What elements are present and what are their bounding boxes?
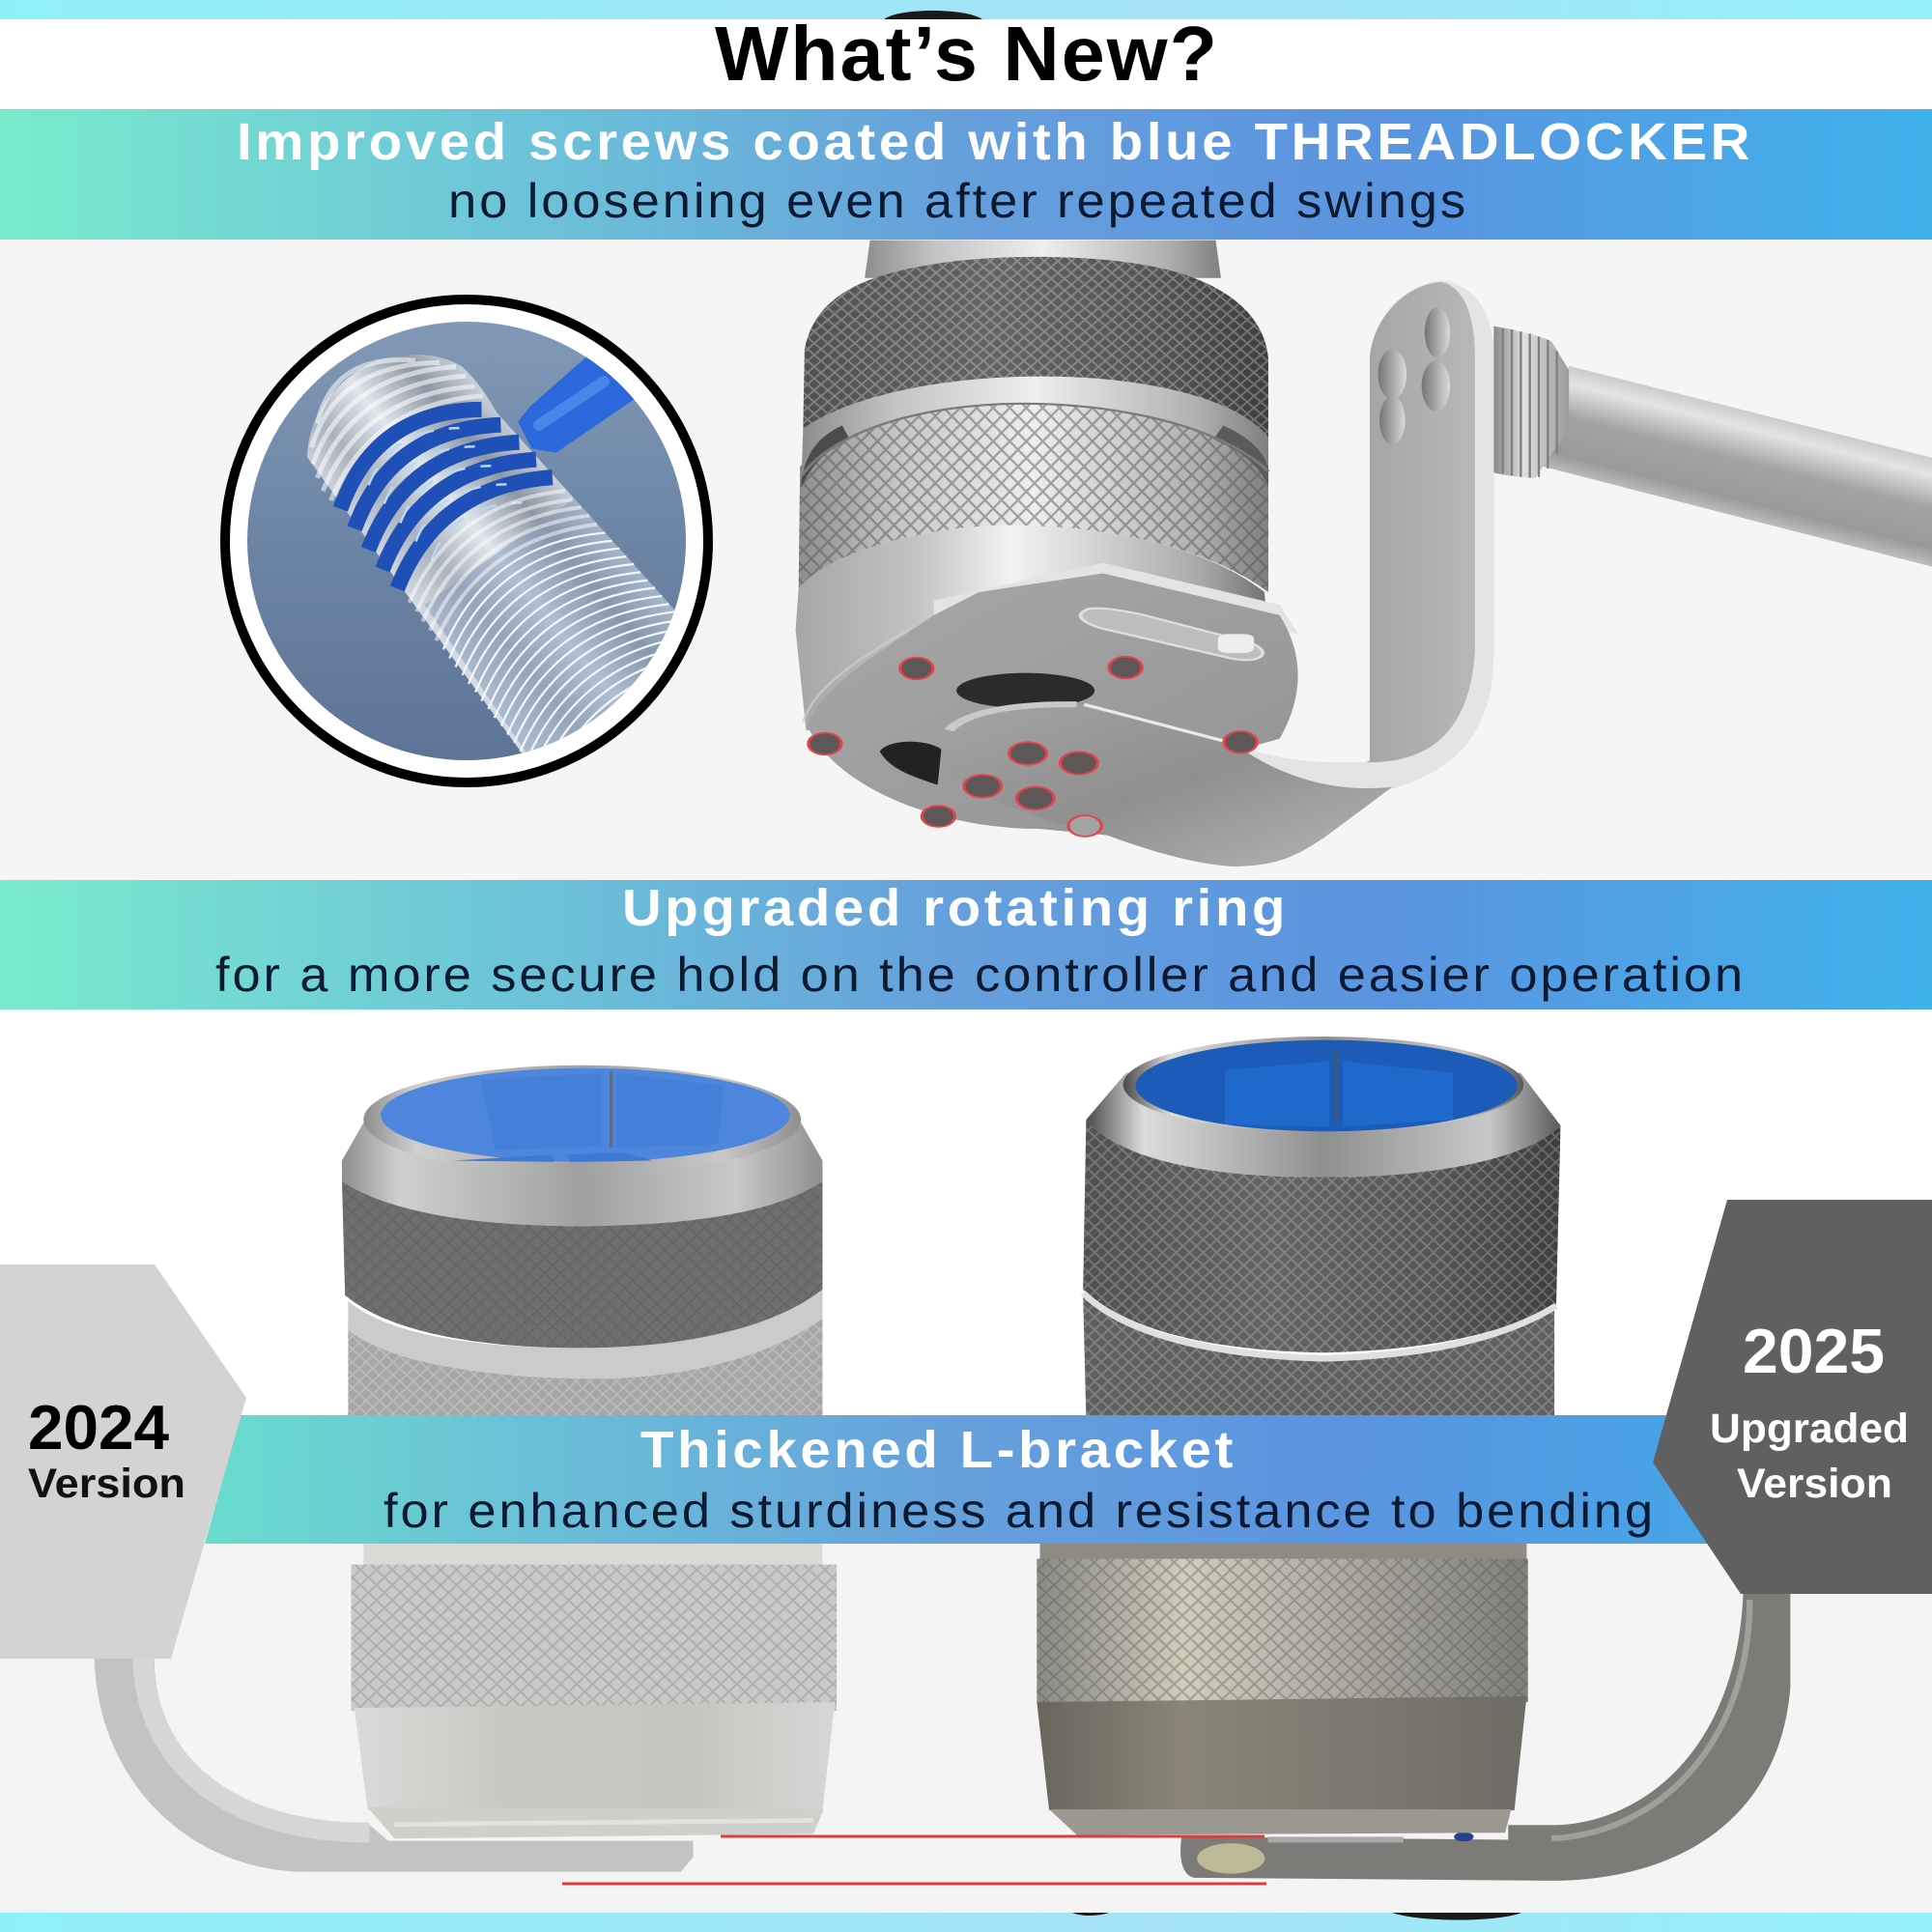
base plate ledge	[934, 563, 1298, 634]
2025 dark knurled ring	[1083, 1120, 1560, 1352]
dark knurled ring	[803, 257, 1268, 438]
band 3 heading: Thickened L-bracket	[640, 1421, 1236, 1479]
badge year 2024: 2024	[28, 1392, 169, 1463]
product: 2024 version grip	[95, 1065, 837, 1872]
threaded rod	[1493, 327, 1932, 567]
2025 bracket	[1180, 1577, 1790, 1881]
panel: threadlocker screws	[0, 240, 1932, 880]
lower bracket arm	[941, 704, 1392, 867]
badge: 2024 version	[0, 1264, 246, 1659]
plate rim	[803, 628, 911, 722]
2025 lower knurled ring	[1083, 1295, 1554, 1418]
top cyan strip	[0, 0, 1932, 19]
badge: 2025 upgraded version	[1653, 1200, 1932, 1594]
badge label Version: Version	[1737, 1461, 1892, 1507]
neck	[865, 241, 1221, 278]
band 2 subheading: for a more secure hold on the controller and easier operation	[215, 948, 1746, 1002]
band 3 subheading: for enhanced sturdiness and resistance to bending	[384, 1484, 1656, 1538]
heading band 3	[205, 1415, 1739, 1544]
2024 lower knurled ring	[348, 1313, 822, 1418]
product: grip with L-bracket, close-up	[796, 241, 1932, 867]
light knurled ring	[799, 396, 1268, 592]
2024 dark knurled ring	[342, 1181, 822, 1348]
2024 groove ring	[348, 1290, 822, 1378]
slot in plate	[1081, 609, 1263, 660]
heading band 1	[0, 109, 1932, 240]
smooth lower body	[796, 526, 1272, 730]
base plate face	[808, 573, 1298, 836]
band 1 heading: Improved screws coated with blue THREADLOCKER	[237, 113, 1753, 171]
silver groove ring	[802, 377, 1268, 475]
icon: magnified screw with blue threadlocker	[220, 295, 713, 787]
icon: blue applicator nozzle	[521, 358, 632, 450]
badge year 2025: 2025	[1743, 1316, 1885, 1386]
product: 2025 version grip	[1037, 1037, 1790, 1881]
red screw markers	[809, 657, 1257, 837]
bottom cyan strip	[0, 1913, 1932, 1932]
2024 bottom body	[352, 1541, 837, 1838]
band 2 heading: Upgraded rotating ring	[622, 879, 1289, 937]
2025 blue insert	[1135, 1040, 1518, 1131]
band 1 subheading: no loosening even after repeated swings	[448, 174, 1468, 228]
heading band 2	[0, 879, 1932, 1009]
dark openings	[880, 673, 1094, 784]
badge label Upgraded: Upgraded	[1710, 1406, 1909, 1452]
2025 bottom body	[1037, 1541, 1528, 1835]
red comparison lines	[562, 1836, 1266, 1884]
2024 blue insert	[381, 1068, 790, 1162]
2025 groove ring	[1083, 1293, 1556, 1358]
panel background	[0, 240, 1932, 880]
2025 top cone	[1086, 1037, 1560, 1178]
2024 bracket	[95, 1653, 694, 1872]
2024 top cone	[342, 1065, 822, 1226]
L-bracket arm	[1235, 280, 1493, 792]
badge label Version: Version	[28, 1461, 185, 1507]
lower light background panel	[0, 1544, 1932, 1913]
title: What’s New?	[715, 11, 1219, 97]
